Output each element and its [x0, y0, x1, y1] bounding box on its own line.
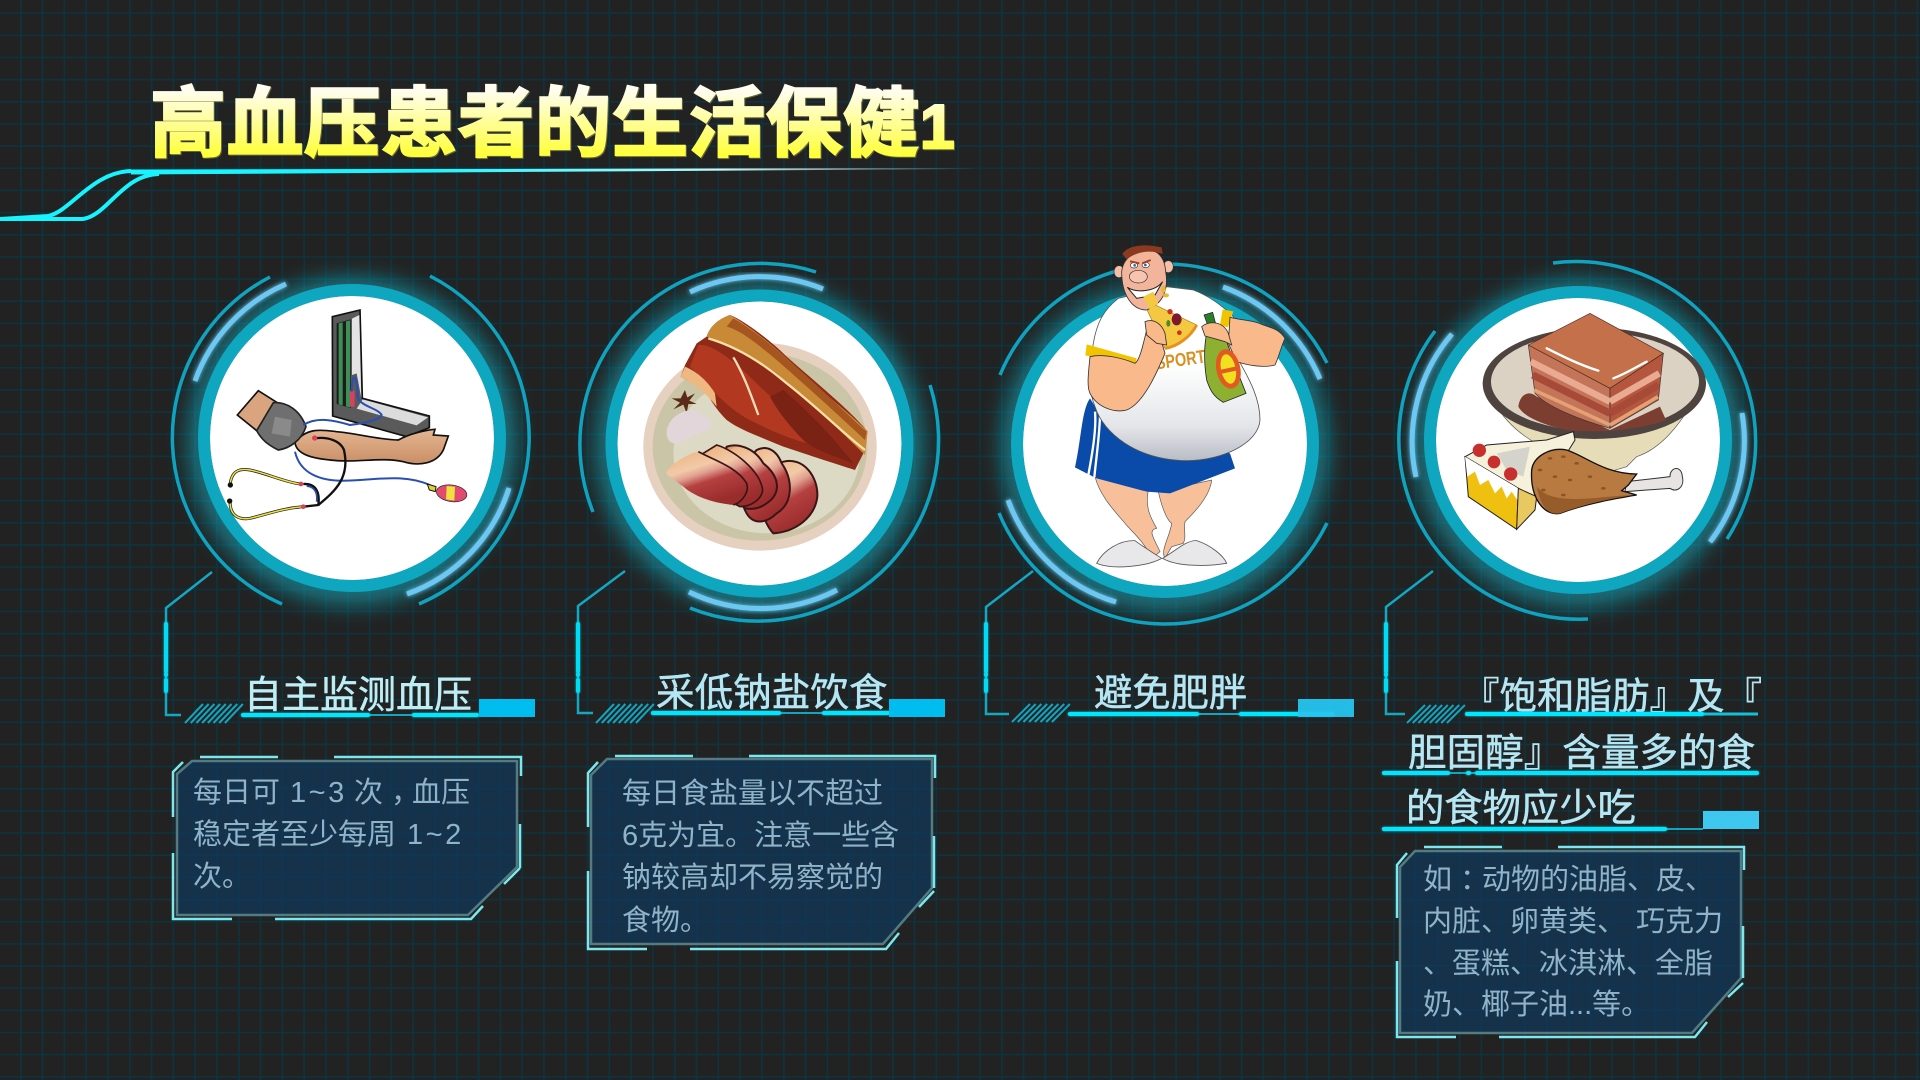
text box: 奶、椰子油...等。	[1423, 988, 1650, 1021]
heading accent bar	[1298, 699, 1354, 717]
icon: plate of cured pork	[643, 315, 877, 551]
heading underline	[652, 712, 889, 714]
text box: 内脏、卵黄类、	[1423, 906, 1626, 938]
text box: 1~2	[407, 819, 464, 851]
hatch	[1012, 704, 1070, 722]
text box: 巧克力	[1636, 905, 1723, 938]
text box: 每日可	[193, 777, 280, 809]
connector	[1386, 571, 1433, 714]
heading underline	[242, 714, 478, 716]
text box: ，	[391, 777, 420, 809]
ring: fatty foods	[1399, 262, 1756, 619]
text box: 6克为宜。注意一些含	[622, 819, 899, 852]
connector	[166, 572, 212, 715]
text box: ：	[1460, 864, 1489, 896]
text box: 次。	[193, 860, 251, 893]
heading accent bar	[889, 699, 945, 717]
panel: self monitoring	[166, 276, 535, 919]
hatch	[596, 704, 654, 723]
text box	[1397, 847, 1744, 1037]
text box	[588, 756, 935, 949]
icon: blood pressure monitor and arm	[227, 310, 468, 519]
text box: 次	[354, 776, 383, 809]
title: 1	[920, 93, 955, 162]
panel: saturated fat	[1383, 262, 1762, 1037]
text box: 钠较高却不易察觉的	[622, 861, 883, 894]
icon: braised pork, cake and drumstick	[1465, 313, 1706, 529]
icon: overweight man eating: SPORT	[1154, 345, 1207, 373]
heading: 避免肥胖	[1094, 672, 1247, 715]
heading: 采低钠盐饮食	[656, 672, 887, 715]
hatch	[1407, 705, 1465, 723]
text box: 稳定者至少每周	[193, 819, 396, 851]
connector highlight	[164, 624, 168, 691]
connector highlight	[984, 624, 988, 691]
ring: cured meat	[580, 263, 939, 621]
heading: 胆固醇』含量多的食	[1408, 732, 1755, 775]
panel: avoid obesity	[986, 245, 1354, 722]
heading accent bar	[479, 699, 535, 717]
title: 高血压患者的生活保健	[150, 82, 920, 167]
connector	[986, 571, 1033, 714]
heading accent bar	[1703, 811, 1759, 829]
icon: overweight man eating	[1075, 245, 1285, 567]
text box: 、蛋糕、冰淇淋、全脂	[1423, 947, 1713, 980]
text box: 动物的油脂、皮、	[1482, 863, 1714, 896]
connector	[578, 571, 625, 713]
heading	[1406, 675, 1762, 830]
connector highlight	[1384, 624, 1388, 691]
text box: 1~3	[290, 777, 347, 809]
panel: low sodium	[578, 263, 945, 949]
heading underline	[1069, 713, 1332, 715]
text box: 每日食盐量以不超过	[622, 777, 883, 810]
ring: obesity	[999, 264, 1327, 624]
text box: 血压	[412, 776, 470, 809]
heading: 的食物应少吃	[1406, 787, 1636, 830]
hatch	[185, 704, 243, 723]
text box: 食物。	[622, 904, 709, 937]
ring: blood pressure	[172, 276, 529, 604]
heading: 自主监测血压	[244, 675, 472, 717]
heading: 『饱和脂肪』及『	[1462, 675, 1762, 717]
connector highlight	[576, 624, 580, 691]
text box	[173, 757, 521, 919]
heading underlines	[1383, 714, 1758, 829]
text box: 如	[1423, 864, 1452, 896]
title underline	[0, 168, 976, 219]
